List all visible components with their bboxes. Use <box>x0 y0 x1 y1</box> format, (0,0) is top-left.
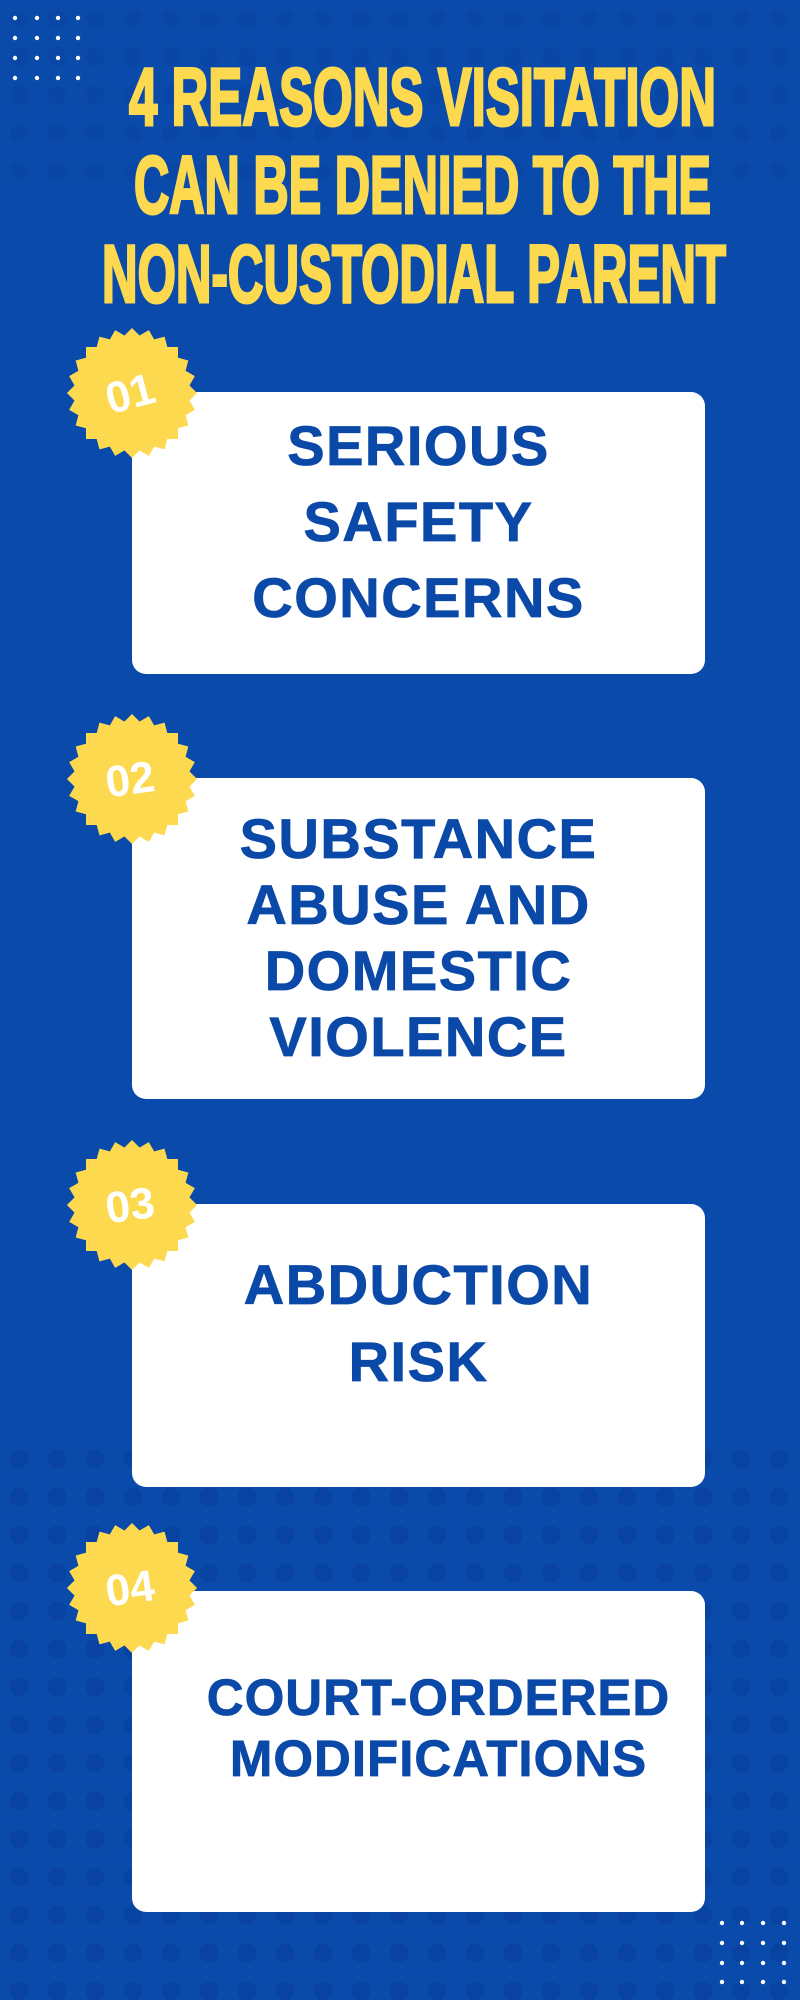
badge 04 <box>67 1523 197 1653</box>
panel 4: court-ordered modifications: COURT-ORDERED <box>207 1669 670 1726</box>
panel 3: abduction risk <box>132 1204 705 1487</box>
panel 2: substance abuse and domestic violence: VIOLENCE <box>269 1005 568 1068</box>
panel 2: substance abuse and domestic violence: ABUSE AND <box>246 873 591 936</box>
decorative dots top-left <box>12 16 80 80</box>
panel 4: court-ordered modifications: MODIFICATIONS <box>230 1730 647 1787</box>
panel 2: substance abuse and domestic violence: DOMESTIC <box>265 939 572 1002</box>
badge 03 <box>67 1140 197 1270</box>
panel 1: serious safety concerns: SERIOUS <box>287 414 550 477</box>
panel 4: court-ordered modifications <box>132 1591 705 1912</box>
badge 04: 04 <box>102 1561 158 1616</box>
badge 03: 03 <box>102 1178 158 1233</box>
panel 1: serious safety concerns: CONCERNS <box>252 566 585 629</box>
badge 01: 01 <box>100 364 160 424</box>
badge 02: 02 <box>102 752 158 807</box>
panel 1: serious safety concerns <box>132 392 705 674</box>
panel 2: substance abuse and domestic violence <box>132 778 705 1099</box>
panel 2: substance abuse and domestic violence: SUBSTANCE <box>240 807 597 870</box>
decorative dots bottom-right <box>720 1920 786 1984</box>
badge 01 <box>67 328 197 458</box>
panel 3: abduction risk: ABDUCTION <box>244 1253 593 1316</box>
badge 02 <box>67 714 197 844</box>
panel 1: serious safety concerns: SAFETY <box>304 490 533 553</box>
title <box>102 52 726 320</box>
panel 3: abduction risk: RISK <box>349 1330 488 1393</box>
